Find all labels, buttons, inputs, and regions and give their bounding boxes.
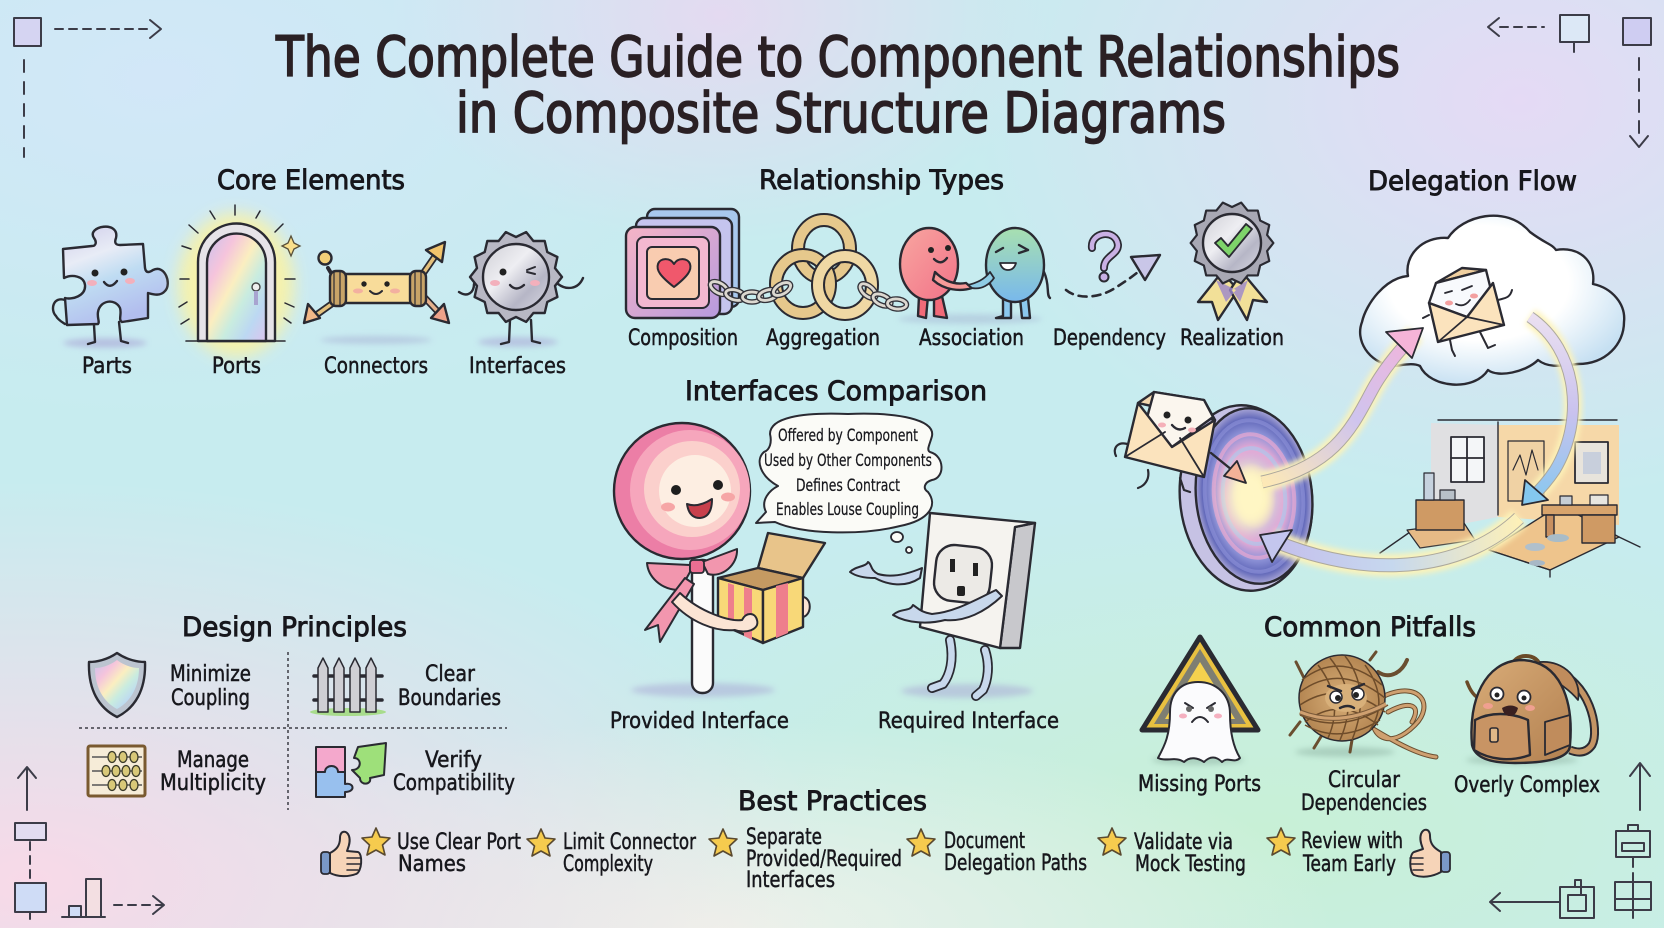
icon: wall socket required interface character <box>850 513 1035 698</box>
text: validate via mock testing: Mock Testing <box>1135 852 1246 877</box>
label: realization: Realization <box>1180 326 1284 351</box>
text: use clear port names: Names <box>398 852 466 877</box>
label: aggregation: Aggregation <box>766 326 880 351</box>
icon: cloud <box>1360 216 1624 385</box>
text: manage multiplicity: Multiplicity <box>160 771 266 796</box>
icon: lollipop provided interface character <box>614 423 775 697</box>
label: interfaces: Interfaces <box>469 354 566 379</box>
text: validate via mock testing: Validate via <box>1134 830 1233 855</box>
section: common pitfalls <box>1138 612 1600 816</box>
icon: overstuffed backpack <box>1466 656 1595 765</box>
text: manage multiplicity <box>160 748 266 796</box>
icon: warning triangle with ghost <box>1142 637 1258 765</box>
text: interface traits: Enables Louse Coupling <box>776 500 919 520</box>
icon: puzzle piece part <box>53 227 168 348</box>
icon: picket fence <box>310 658 386 716</box>
label: connectors: Connectors <box>324 354 428 379</box>
speech bubble <box>756 414 942 553</box>
text: minimize coupling <box>170 662 251 711</box>
icon: star 1 <box>362 828 390 855</box>
corner decoration: top right <box>1488 15 1651 147</box>
title: The Complete Guide to Component Relationships <box>275 25 1400 89</box>
icon: tangled yarn ball <box>1290 652 1436 757</box>
icon: abacus <box>88 746 145 796</box>
corner decoration: bottom left <box>15 767 164 919</box>
text: verify compatibility: Verify <box>425 748 482 773</box>
text: limit connector complexity: Complexity <box>563 852 653 877</box>
title <box>275 25 1400 145</box>
text: validate via mock testing <box>1134 830 1246 877</box>
heading: relationship types: Relationship Types <box>759 165 1004 196</box>
icon: shield <box>89 653 145 717</box>
icon: thumbs up right <box>1410 830 1450 877</box>
heading: design principles: Design Principles <box>182 612 407 643</box>
icon: envelope character entering portal <box>1115 392 1246 492</box>
section: relationship types <box>626 165 1284 351</box>
text: review with team early: Team Early <box>1302 852 1396 877</box>
text: clear boundaries <box>398 662 501 711</box>
label: circular dependencies: Dependencies <box>1301 791 1427 816</box>
icon: association handshaking characters <box>898 228 1050 324</box>
text: interface traits: Used by Other Components <box>764 451 932 471</box>
label: composition: Composition <box>628 326 738 351</box>
icon: star 2 <box>527 829 555 856</box>
heading: delegation flow: Delegation Flow <box>1368 166 1577 197</box>
text: document delegation paths: Delegation Paths <box>944 851 1087 876</box>
text: interface traits: Offered by Component <box>778 426 918 446</box>
section: best practices <box>321 786 1450 893</box>
icon: winking gear interface <box>459 232 583 347</box>
text: separate provided required interfaces: Separate <box>746 825 822 850</box>
title: in Composite Structure Diagrams <box>456 81 1226 145</box>
corner decoration: top left <box>14 18 161 157</box>
label: ports: Ports <box>212 354 261 379</box>
text: interface traits: Defines Contract <box>796 476 900 496</box>
label: missing ports: Missing Ports <box>1138 772 1261 797</box>
text: verify compatibility: Compatibility <box>393 771 515 796</box>
section: core elements <box>53 165 583 379</box>
label: parts: Parts <box>82 354 132 379</box>
section: interfaces comparison <box>610 376 1059 734</box>
arrow: portal to cloud <box>1262 328 1423 482</box>
label: circular dependencies <box>1301 768 1427 816</box>
icon: fitted puzzle pieces <box>316 743 386 797</box>
corner decoration: bottom right <box>1490 763 1651 918</box>
text: separate provided required interfaces: Interfaces <box>746 868 835 893</box>
label: overly complex: Overly Complex <box>1454 773 1600 798</box>
icon: chain links <box>708 279 907 310</box>
icon: composition nested squares with heart <box>626 209 739 318</box>
text: manage multiplicity: Manage <box>177 748 249 773</box>
label: required interface: Required Interface <box>878 709 1059 734</box>
icon: realization badge with checkmark <box>1191 203 1273 320</box>
icon: dependency question mark and dashed arrow <box>1066 234 1160 297</box>
section: design principles <box>79 612 515 810</box>
heading: interfaces comparison: Interfaces Comparison <box>685 376 987 407</box>
section: delegation flow <box>1115 166 1640 597</box>
text: separate provided required interfaces <box>746 825 902 893</box>
arrow: room to portal <box>1260 518 1519 565</box>
text: interface traits <box>764 426 932 520</box>
icon: glowing rainbow door port <box>178 205 300 357</box>
icon: swirling portal <box>1171 399 1321 597</box>
icon: rope connector with arrows <box>304 242 449 344</box>
text: limit connector complexity <box>563 830 697 877</box>
text: use clear port names <box>397 830 521 877</box>
text: document delegation paths <box>944 829 1087 876</box>
icon: open gift box <box>672 533 825 643</box>
icon: room with desk <box>1380 420 1640 577</box>
icon: star 4 <box>907 829 935 856</box>
label: provided interface: Provided Interface <box>610 709 789 734</box>
arrow: cloud to room <box>1522 317 1573 505</box>
icon: star 5 <box>1098 828 1126 855</box>
heading: best practices: Best Practices <box>738 786 927 817</box>
icon: star 3 <box>709 829 737 856</box>
icon: thumbs up left <box>321 832 361 876</box>
text: use clear port names: Use Clear Port <box>397 830 521 855</box>
text: verify compatibility <box>393 748 515 796</box>
text: limit connector complexity: Limit Connector <box>563 830 697 855</box>
text: minimize coupling: Minimize <box>170 662 251 687</box>
label: dependency: Dependency <box>1053 326 1166 351</box>
text: review with team early: Review with <box>1301 829 1403 854</box>
heading: common pitfalls: Common Pitfalls <box>1264 612 1476 643</box>
label: circular dependencies: Circular <box>1328 768 1401 793</box>
icon: aggregation interlocked rings <box>776 220 872 314</box>
icon: star 6 <box>1267 828 1295 855</box>
text: clear boundaries: Boundaries <box>398 686 501 711</box>
text: minimize coupling: Coupling <box>171 686 250 711</box>
icon: envelope character in cloud <box>1423 268 1512 356</box>
heading: core elements: Core Elements <box>217 165 405 196</box>
text: document delegation paths: Document <box>944 829 1025 854</box>
label: association: Association <box>919 326 1024 351</box>
grid dividers <box>79 652 507 810</box>
text: clear boundaries: Clear <box>425 662 476 687</box>
text: review with team early <box>1301 829 1403 877</box>
text: separate provided required interfaces: Provided/Required <box>746 847 902 872</box>
